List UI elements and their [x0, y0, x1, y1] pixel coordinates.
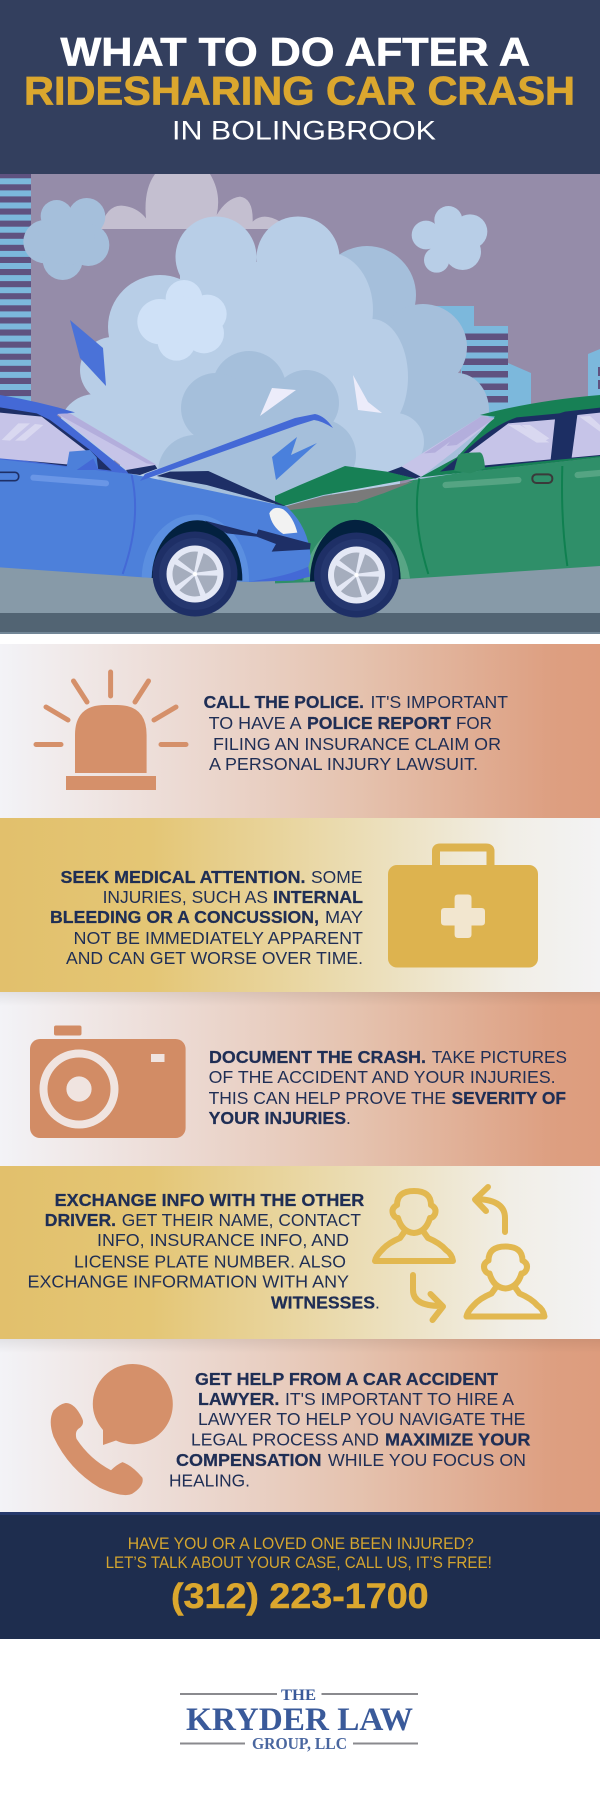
logo: the kryder law group	[180, 1687, 418, 1753]
title line 3: IN BOLINGBROOK	[172, 116, 436, 146]
right wheel	[314, 532, 399, 618]
panel: seek medical attention	[0, 818, 600, 992]
blue car	[0, 395, 311, 582]
bright smoke puff	[137, 280, 227, 361]
text: exchange info: LICENSE PLATE NUMBER. ALSO	[74, 1252, 346, 1272]
panel: get help from a lawyer	[0, 1339, 600, 1512]
left striped building	[0, 174, 31, 414]
text: document the crash: DOCUMENT THE CRASH.	[209, 1047, 426, 1067]
logo: the kryder law group: KRYDER LAW	[186, 1702, 413, 1738]
text: call the police: CALL THE POLICE.	[204, 692, 364, 712]
smoke back layer	[318, 246, 489, 480]
text: seek medical attention: INJURIES, SUCH AS	[103, 887, 268, 907]
text: document the crash: SEVERITY OF	[452, 1088, 566, 1108]
phone number: (312) 223-1700	[171, 1577, 429, 1616]
text: call the police: A PERSONAL INJURY LAWSUIT.	[209, 754, 478, 774]
text: exchange info: EXCHANGE INFORMATION WITH ANY	[28, 1272, 349, 1292]
text: document the crash: THIS CAN HELP PROVE THE	[209, 1088, 446, 1108]
panel: exchange info	[0, 1166, 600, 1339]
person one	[375, 1191, 453, 1261]
text: get help: MAXIMIZE YOUR	[385, 1430, 531, 1450]
green car	[275, 395, 600, 583]
text: get help: HEALING.	[169, 1470, 250, 1490]
raised blue hood	[140, 414, 333, 481]
text: exchange info: WITNESSES	[271, 1292, 375, 1312]
text: seek medical attention: BLEEDING OR A CONCUSSION,	[50, 907, 319, 927]
text: seek medical attention	[50, 867, 363, 968]
road	[0, 560, 600, 634]
panel: document the crash	[0, 992, 600, 1166]
title line 1: WHAT TO DO AFTER A	[60, 30, 530, 74]
text: call the police: FILING AN INSURANCE CLAIM OR	[213, 734, 501, 754]
smoke front layer	[59, 216, 424, 510]
person two	[466, 1246, 544, 1316]
text: document the crash	[209, 1047, 567, 1128]
arrow down	[413, 1275, 443, 1320]
header panel	[0, 0, 600, 174]
hero illustration: car crash	[0, 174, 600, 634]
text: call the police	[204, 692, 508, 774]
cta text line 2: LET’S TALK ABOUT YOUR CASE, CALL US, IT’S FREE!	[106, 1554, 492, 1572]
pale cloud behind	[100, 174, 287, 229]
text: call the police: POLICE REPORT	[307, 713, 451, 733]
small cloud upper left	[23, 198, 109, 280]
text: document the crash: OF THE ACCIDENT AND YOUR INJURIES.	[209, 1067, 556, 1087]
text: exchange info: EXCHANGE INFO WITH THE OTHER	[55, 1190, 365, 1210]
text: document the crash: YOUR INJURIES	[209, 1108, 346, 1128]
text: get help: LAWYER.	[198, 1389, 279, 1409]
footer call to action	[0, 1512, 600, 1639]
small cloud upper right	[412, 206, 487, 273]
text: call the police: TO HAVE A	[209, 713, 302, 733]
cta text: HAVE YOU OR A LOVED ONE BEEN INJURED?	[128, 1535, 474, 1553]
text: seek medical attention: SEEK MEDICAL ATTENTION.	[60, 867, 306, 887]
icon: two people with exchange arrows	[375, 1187, 544, 1320]
text: get help: LAWYER TO HELP YOU NAVIGATE THE	[198, 1409, 525, 1429]
text: seek medical attention: INTERNAL	[273, 887, 363, 907]
text: exchange info: GET THEIR NAME, CONTACT	[122, 1210, 361, 1230]
panel: call the police	[0, 644, 600, 818]
right buildings	[436, 306, 600, 430]
text: get help: WHILE YOU FOCUS ON	[328, 1450, 526, 1470]
text: get help: LEGAL PROCESS AND	[191, 1430, 379, 1450]
phone handset	[51, 1403, 143, 1495]
icon: camera	[30, 1026, 186, 1138]
text: call the police: FOR	[456, 713, 492, 733]
flying debris	[70, 320, 382, 480]
text: seek medical attention: NOT BE IMMEDIATELY APPARENT	[74, 928, 363, 948]
text: exchange info: DRIVER.	[45, 1210, 116, 1230]
speech bubble	[93, 1364, 173, 1445]
text: get help	[169, 1369, 531, 1490]
icon: phone with speech bubble	[51, 1364, 173, 1495]
text: get help: GET HELP FROM A CAR ACCIDENT	[195, 1369, 498, 1389]
text: document the crash: .	[346, 1108, 351, 1128]
text: seek medical attention: SOME	[311, 867, 362, 887]
icon: siren	[36, 672, 186, 790]
logo: the kryder law group: GROUP, LLC	[252, 1734, 347, 1753]
text: seek medical attention: MAY	[325, 907, 363, 927]
icon: first aid kit	[388, 848, 538, 968]
text: get help: COMPENSATION	[176, 1450, 322, 1470]
text: exchange info: INFO, INSURANCE INFO, AND	[97, 1230, 349, 1250]
text: call the police: IT'S IMPORTANT	[370, 692, 508, 712]
left wheel	[152, 532, 238, 616]
text: exchange info: .	[375, 1292, 380, 1312]
smoke middle layer	[158, 351, 356, 525]
text: seek medical attention: AND CAN GET WORSE OVER TIME.	[66, 948, 363, 968]
arrow up	[475, 1187, 505, 1232]
logo: the kryder law group: THE	[281, 1687, 316, 1704]
text: exchange info	[28, 1190, 380, 1312]
title line 2: RIDESHARING CAR CRASH	[24, 70, 575, 114]
text: get help: IT'S IMPORTANT TO HIRE A	[285, 1389, 514, 1409]
text: document the crash: TAKE PICTURES	[432, 1047, 567, 1067]
